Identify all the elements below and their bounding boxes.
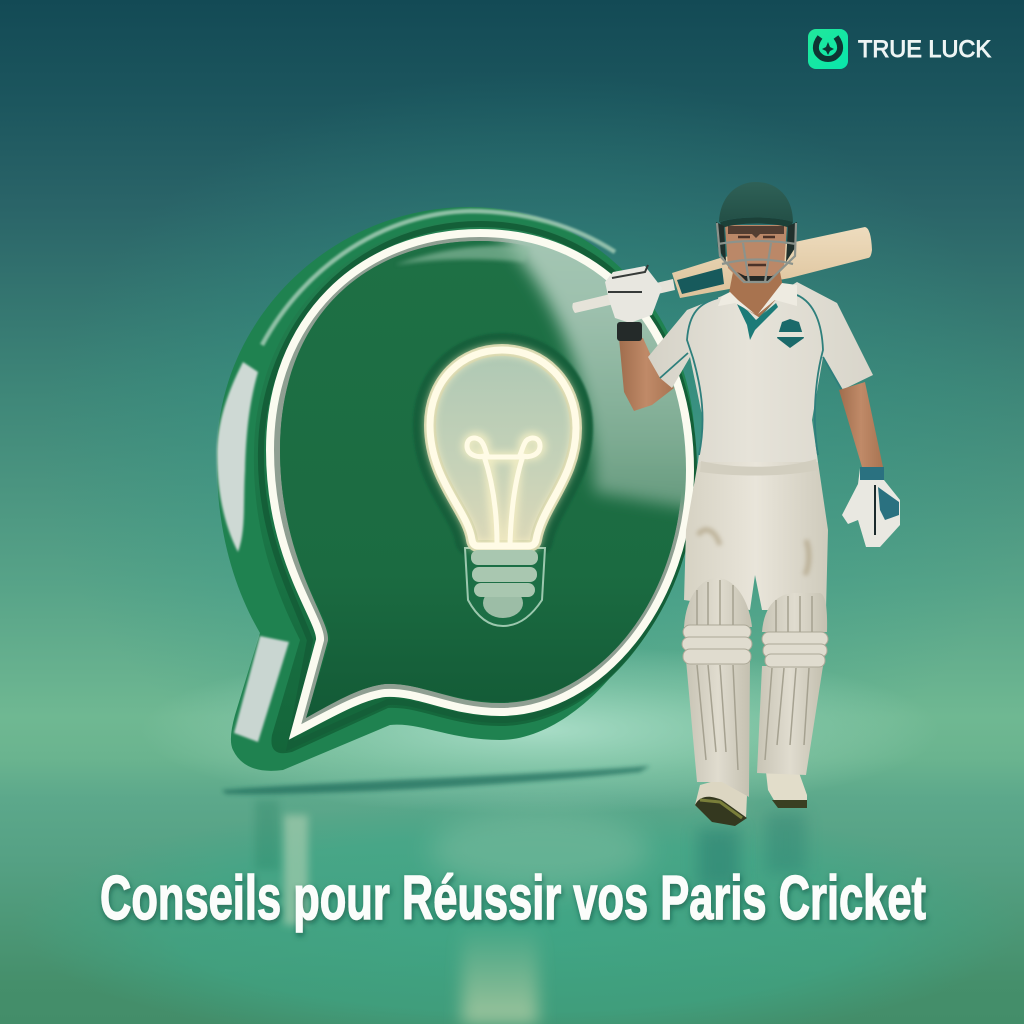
- shirt badge band: [777, 332, 804, 337]
- bat: [572, 227, 872, 313]
- head: [725, 225, 787, 283]
- bulb glass: [430, 350, 576, 546]
- bulb neon glow: [430, 350, 576, 546]
- helmet grille: [717, 223, 796, 282]
- bat label: [677, 268, 724, 294]
- pad left knee: [684, 578, 752, 627]
- batting glove right: [842, 467, 900, 547]
- shirt badge: [777, 319, 804, 348]
- bat handle: [572, 279, 675, 313]
- trousers: [684, 459, 828, 610]
- lightbulb icon: [430, 350, 576, 618]
- helmet brim: [720, 218, 793, 228]
- eye shadow: [728, 226, 784, 238]
- waistband: [700, 459, 818, 476]
- bubble floor shadow: [222, 766, 650, 794]
- bat blade: [672, 227, 872, 298]
- bulb filament: [467, 438, 540, 544]
- chin guard: [737, 272, 780, 283]
- cricket player: [572, 182, 900, 826]
- leg pad right: [757, 593, 828, 775]
- bubble outer body: [217, 207, 695, 771]
- neck: [728, 272, 784, 318]
- bubble top edge highlight: [262, 211, 615, 345]
- left arm: [619, 338, 674, 411]
- pad left shin: [686, 660, 750, 797]
- pad left ribs: [697, 580, 738, 770]
- batting glove left: [605, 265, 662, 341]
- pad right ribs: [765, 596, 812, 760]
- bubble rim: [254, 220, 695, 753]
- brand logo: [808, 29, 991, 69]
- speech bubble with lightbulb: [217, 207, 710, 771]
- shirt trim: [660, 295, 842, 455]
- right arm: [839, 382, 883, 467]
- pad left rolls: [682, 625, 752, 664]
- logo icon: horseshoe: [808, 29, 848, 69]
- helmet side straps: [716, 222, 797, 262]
- trousers shape: [684, 462, 828, 610]
- pad right knee: [762, 593, 827, 632]
- trouser dirt: [698, 530, 809, 575]
- logo wordmark: TRUE LUCK: [858, 36, 991, 63]
- shirt collar left: [718, 292, 755, 314]
- floor reflections: [255, 800, 806, 1024]
- helmet shell: [719, 182, 793, 222]
- bubble gloss: [398, 238, 686, 516]
- shirt placket: [736, 302, 778, 340]
- bubble silver edge left: [217, 362, 258, 552]
- bulb neon outline: [430, 350, 576, 546]
- pad right rolls: [762, 632, 828, 667]
- face: [725, 225, 787, 282]
- shirt collar right: [758, 283, 797, 314]
- bulb base recess: [465, 548, 545, 626]
- shirt: [648, 282, 873, 462]
- leg pad left: [682, 578, 752, 797]
- bubble dark rim band: [261, 224, 694, 746]
- shoe left: [695, 778, 747, 826]
- shoe right: [766, 767, 807, 808]
- bulb recess: [430, 350, 576, 540]
- bubble neon housing: [276, 237, 686, 726]
- bulb screw base: [471, 550, 538, 618]
- bubble neon line: [270, 233, 690, 732]
- bubble silver tail edge: [234, 636, 289, 742]
- shirt body: [648, 282, 873, 462]
- bubble face: [280, 241, 682, 718]
- pad right shin: [757, 666, 823, 775]
- helmet: [716, 182, 797, 282]
- eyes and mouth: [738, 237, 775, 265]
